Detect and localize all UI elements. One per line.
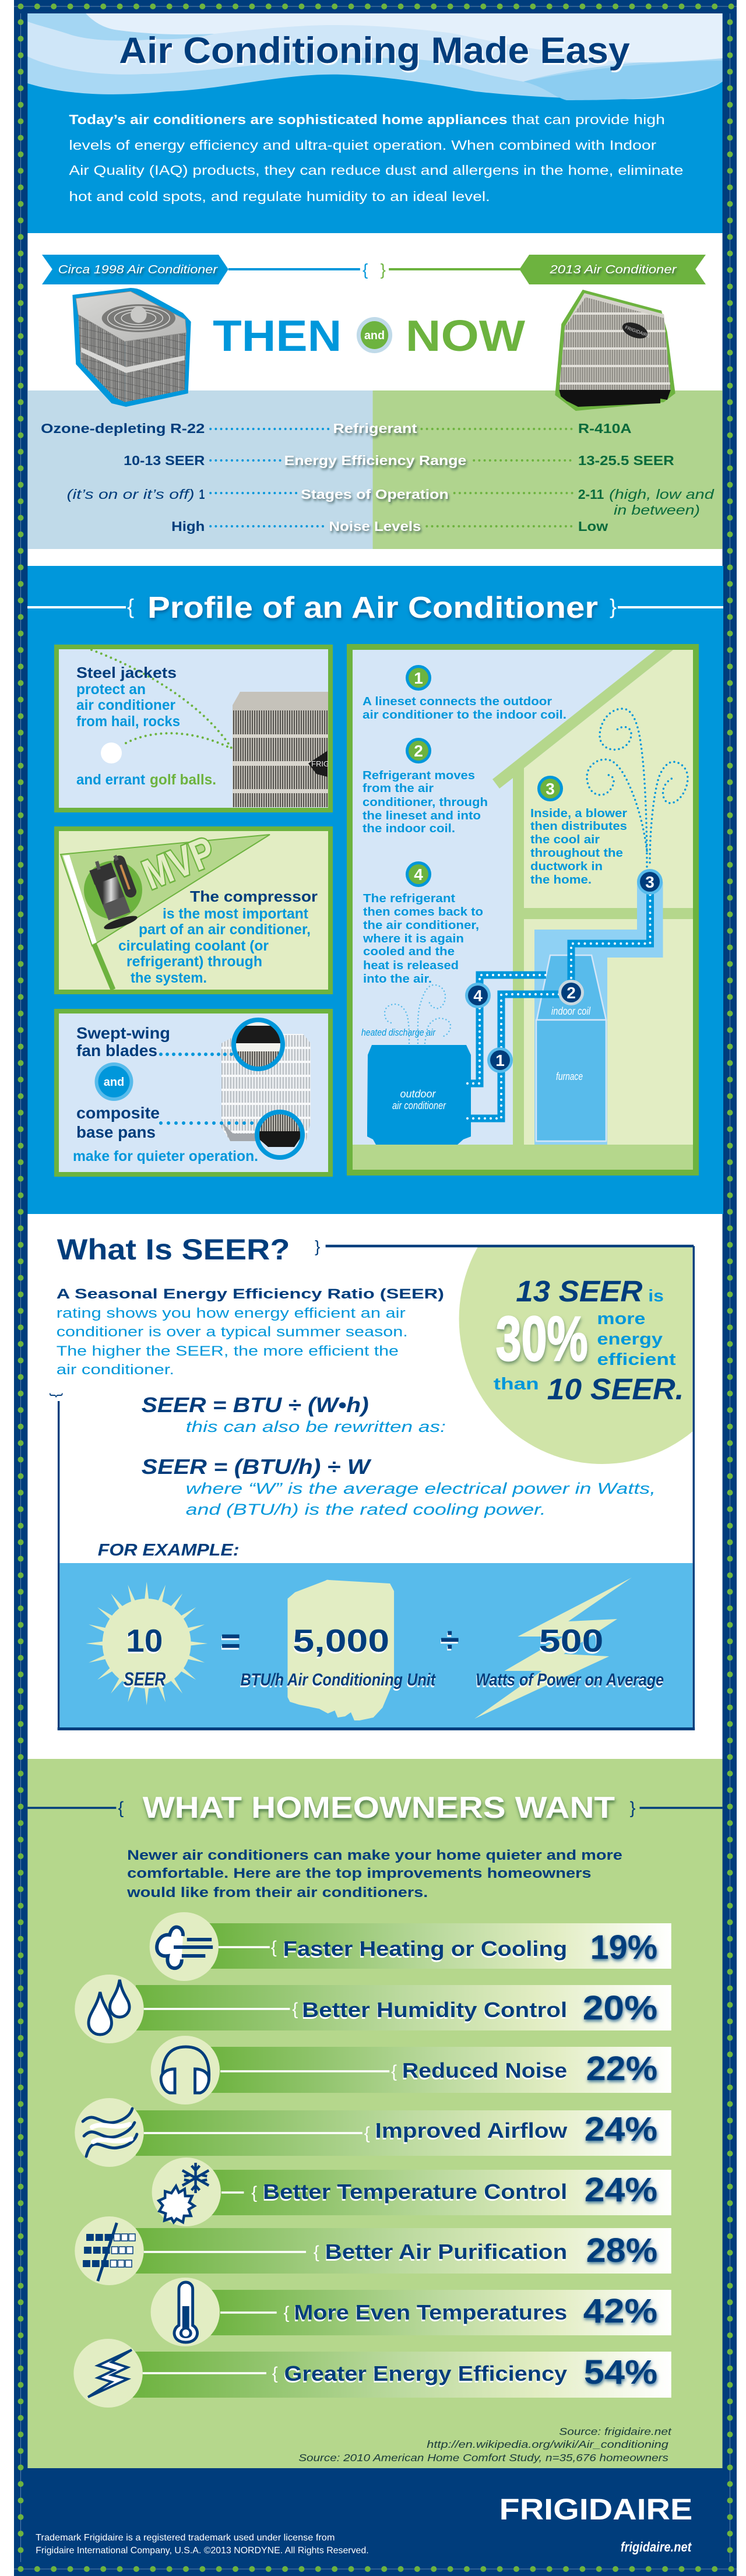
heading: profile: } bbox=[610, 594, 617, 618]
step 3: 3 bbox=[546, 780, 555, 798]
heading: then and now: and bbox=[364, 329, 385, 342]
text: quieter operation bbox=[73, 1024, 258, 1164]
row: better temperature control bbox=[152, 2158, 671, 2226]
card: compressor bbox=[57, 828, 330, 992]
callout: 30 percent: is bbox=[648, 1287, 664, 1305]
card: quieter operation bbox=[57, 1011, 330, 1174]
equation: 5000: BTU/h Air Conditioning Unit bbox=[241, 1670, 436, 1690]
step 4: into the air. bbox=[363, 973, 432, 986]
intro text: would like from their air conditioners. bbox=[126, 1885, 428, 1901]
step 2: conditioner, through bbox=[363, 796, 488, 809]
step 3: then distributes bbox=[530, 820, 627, 833]
text: compressor: is the most important bbox=[163, 906, 309, 922]
card: how the system works bbox=[350, 647, 696, 1173]
card: how the system works: heated discharge air bbox=[361, 1027, 436, 1038]
banner: 2013: 2013 Air Conditioner bbox=[549, 263, 677, 276]
sources: http://en.wikipedia.org/wiki/Air_conditioning bbox=[427, 2438, 668, 2450]
row: refrigerant: Ozone-depleting R-22 bbox=[41, 421, 205, 436]
step badges on diagram: 3 bbox=[645, 873, 654, 891]
heading: then and now bbox=[213, 312, 526, 360]
equation: 500: Watts of Power on Average bbox=[476, 1670, 664, 1690]
intro text: comfortable. Here are the top improvements homeowners bbox=[127, 1866, 592, 1881]
definition text: The higher the SEER, the more efficient the bbox=[57, 1343, 399, 1359]
row: more even temperatures: More Even Temperatures bbox=[294, 2301, 567, 2324]
panel: what homeowners want bbox=[27, 1759, 723, 2468]
row: energy efficiency range: 10-13 SEER bbox=[124, 453, 205, 468]
banner: circa 1998: { bbox=[363, 261, 368, 279]
formulas: where “W” is the average electrical power in Watts, bbox=[186, 1480, 656, 1497]
callout: 30 percent: energy bbox=[597, 1330, 663, 1349]
formulas: this can also be rewritten as: bbox=[186, 1418, 446, 1435]
step badges on diagram: 4 bbox=[473, 987, 483, 1005]
icon: air filter bbox=[83, 2223, 135, 2281]
intro text: that can provide high bbox=[512, 112, 665, 127]
furnace and indoor coil bbox=[536, 955, 606, 1141]
icon: energy bolt bbox=[88, 2350, 132, 2397]
text: quieter operation: fan blades bbox=[76, 1041, 157, 1060]
text: steel jackets: Steel jackets bbox=[76, 664, 177, 681]
row: stages of operation bbox=[66, 487, 715, 518]
icon: old air conditioner bbox=[72, 288, 191, 407]
air swirls: outdoor bbox=[385, 985, 451, 1043]
card: steel jackets bbox=[57, 647, 332, 810]
equation: 10 seer bbox=[124, 1623, 166, 1690]
text: quieter operation: composite bbox=[76, 1104, 160, 1122]
equation: 500: 500 bbox=[539, 1623, 603, 1659]
definition text: A Seasonal Energy Efficiency Ratio (SEER) bbox=[57, 1286, 444, 1302]
step 4: cooled and the bbox=[363, 945, 455, 958]
intro text: Newer air conditioners can make your home quieter and more bbox=[127, 1847, 622, 1863]
step 2 bbox=[363, 738, 488, 835]
icon: lightning bolt bbox=[474, 1578, 632, 1719]
step badges on diagram bbox=[465, 869, 663, 1073]
row: better temperature control: Better Temperature Control bbox=[263, 2180, 567, 2204]
row: improved airflow: Improved Airflow bbox=[375, 2119, 567, 2142]
row: faster heating or cooling bbox=[150, 1912, 671, 1981]
intro text: Today’s air conditioners are sophisticated home appliances bbox=[69, 112, 507, 127]
banner: circa 1998: Circa 1998 Air Conditioner bbox=[58, 263, 219, 276]
step 2: 2 bbox=[414, 742, 423, 760]
step 1: A lineset connects the outdoor bbox=[363, 695, 552, 708]
row: reduced noise: 22% bbox=[586, 2050, 657, 2088]
furnace and indoor coil: indoor coil bbox=[551, 1005, 591, 1017]
row: better humidity control bbox=[75, 1975, 671, 2043]
text: compressor: the system. bbox=[131, 970, 207, 986]
panel: what is seer bbox=[27, 1174, 745, 1759]
row: faster heating or cooling: { bbox=[271, 1938, 277, 1957]
text: compressor bbox=[118, 888, 318, 986]
step badges on diagram: 2 bbox=[566, 984, 576, 1002]
row: better air purification bbox=[75, 2216, 671, 2285]
heading: profile: Profile of an Air Conditioner bbox=[147, 591, 598, 625]
frame lines: } bbox=[315, 1237, 320, 1255]
step 2: the indoor coil. bbox=[363, 822, 455, 835]
sources bbox=[298, 2426, 672, 2464]
equation: 5000: 5,000 bbox=[293, 1623, 389, 1659]
row: stages of operation: 2-11 bbox=[578, 487, 604, 502]
callout circle bbox=[459, 1247, 692, 1464]
icon: compressor bbox=[97, 856, 139, 932]
refrigerant lines bbox=[467, 882, 650, 1118]
row: better humidity control: Better Humidity Control bbox=[302, 1998, 567, 2022]
row: noise levels bbox=[171, 519, 608, 534]
outdoor air conditioner: air conditioner bbox=[392, 1100, 446, 1111]
definition text: conditioner is over a typical summer season. bbox=[57, 1324, 408, 1340]
callout: 30 percent: more bbox=[597, 1310, 645, 1328]
step 4: where it is again bbox=[363, 932, 464, 945]
row: greater energy efficiency bbox=[73, 2339, 671, 2408]
logo: frigidaire: FRIGIDAIRE bbox=[499, 2493, 692, 2526]
callout: 30 percent: 10 SEER. bbox=[547, 1373, 684, 1406]
equation: 5000 bbox=[241, 1623, 436, 1690]
step 4: heat is released bbox=[363, 959, 459, 972]
intro text: levels of energy efficiency and ultra-quiet operation. When combined with Indoor bbox=[69, 138, 657, 153]
heading: homeowners bbox=[27, 1790, 723, 1824]
legal text bbox=[36, 2533, 369, 2556]
row: refrigerant bbox=[41, 421, 632, 436]
row: improved airflow: 24% bbox=[585, 2111, 657, 2148]
row: energy efficiency range bbox=[124, 453, 674, 468]
row: better temperature control: { bbox=[251, 2183, 257, 2202]
row: faster heating or cooling: 19% bbox=[590, 1929, 657, 1966]
icon: unit with steel jacket bbox=[233, 692, 332, 807]
row: greater energy efficiency: 54% bbox=[584, 2354, 657, 2391]
equation: equals: = bbox=[220, 1621, 241, 1660]
heading: then and now: NOW bbox=[406, 312, 526, 360]
row: reduced noise: { bbox=[391, 2062, 397, 2081]
text: compressor: circulating coolant (or bbox=[118, 938, 269, 954]
row: noise levels: Noise Levels bbox=[329, 519, 421, 534]
badge: and bbox=[94, 1062, 133, 1101]
frame lines: { bbox=[48, 1393, 64, 1398]
furnace and indoor coil: furnace bbox=[556, 1071, 583, 1082]
outdoor air conditioner: outdoor bbox=[400, 1088, 437, 1100]
icon: unit with steel jacket: FRIG bbox=[311, 759, 329, 768]
row: refrigerant: R-410A bbox=[578, 421, 632, 436]
panel: example equation bbox=[58, 1563, 695, 1730]
heading: homeowners: { bbox=[118, 1799, 124, 1818]
heading: what is seer: What Is SEER? bbox=[57, 1233, 290, 1266]
heading: homeowners: WHAT HOMEOWNERS WANT bbox=[143, 1790, 615, 1824]
row: reduced noise bbox=[151, 2036, 671, 2105]
row: refrigerant: Refrigerant bbox=[333, 421, 417, 436]
step 1 bbox=[363, 665, 566, 722]
icon: air blowing cloud bbox=[157, 1927, 213, 1968]
icon: snowflake and sun bbox=[159, 2163, 209, 2222]
step 4: then comes back to bbox=[363, 906, 483, 919]
panel: profile of an air conditioner bbox=[27, 566, 723, 1214]
callout: 30 percent bbox=[494, 1275, 684, 1406]
formulas: and (BTU/h) is the rated cooling power. bbox=[186, 1501, 546, 1518]
definition text: air conditioner. bbox=[57, 1362, 174, 1378]
text: compressor: part of an air conditioner, bbox=[139, 921, 311, 938]
row: energy efficiency range: 13-25.5 SEER bbox=[578, 453, 674, 468]
legal text: Frigidaire International Company, U.S.A. ©2013 NORDYNE. All Rights Reserved. bbox=[36, 2546, 369, 2556]
equation: 10 seer: SEER bbox=[124, 1669, 166, 1690]
website: frigidaire.net bbox=[621, 2539, 692, 2554]
icon: mvp pennant: MVP bbox=[136, 828, 221, 899]
icon: new air conditioner bbox=[555, 290, 675, 411]
icon: water drops bbox=[89, 1980, 129, 2035]
sources: Source: frigidaire.net bbox=[559, 2426, 672, 2437]
row: better temperature control: 24% bbox=[585, 2172, 657, 2209]
text: steel jackets: from hail, rocks bbox=[76, 713, 180, 730]
house bbox=[353, 650, 693, 1170]
callout: 30 percent: 30% bbox=[496, 1303, 588, 1374]
formulas: SEER = (BTU/h) ÷ W bbox=[142, 1455, 372, 1479]
text: steel jackets: protect an bbox=[76, 681, 146, 698]
callout dots bbox=[161, 1054, 256, 1123]
equation: 500 bbox=[476, 1623, 664, 1690]
icon: headphones bbox=[161, 2047, 209, 2093]
row: better air purification: Better Air Purification bbox=[325, 2240, 567, 2264]
text: steel jackets: golf balls. bbox=[150, 772, 216, 788]
step 2: the lineset and into bbox=[363, 810, 481, 822]
row: noise levels: Low bbox=[578, 519, 608, 534]
step 1: air conditioner to the indoor coil. bbox=[363, 709, 566, 722]
definition text bbox=[57, 1286, 444, 1378]
heading: then and now: THEN bbox=[213, 312, 342, 360]
callout: 30 percent: 13 SEER bbox=[516, 1275, 643, 1308]
sky waves bbox=[27, 13, 723, 100]
legal text: Trademark Frigidaire is a registered trademark used under license from bbox=[36, 2533, 335, 2543]
row: better air purification: 28% bbox=[586, 2232, 657, 2269]
row: energy efficiency range: Energy Efficiency Range bbox=[284, 453, 466, 468]
row: faster heating or cooling: Faster Heating or Cooling bbox=[283, 1937, 567, 1961]
heading: profile: { bbox=[127, 594, 134, 618]
row: greater energy efficiency: { bbox=[272, 2364, 278, 2383]
row: better humidity control: 20% bbox=[583, 1990, 657, 2027]
text: steel jackets: and errant bbox=[76, 772, 146, 788]
icon: new air conditioner: FRIGIDAIRE bbox=[624, 325, 651, 339]
step 2: Refrigerant moves bbox=[363, 769, 475, 782]
step 4: 4 bbox=[414, 865, 423, 884]
step 3: throughout the bbox=[530, 847, 623, 860]
intro text: Air Quality (IAQ) products, they can reduce dust and allergens in the home, eliminate bbox=[69, 163, 683, 178]
text: steel jackets bbox=[76, 664, 216, 788]
row: more even temperatures: 42% bbox=[583, 2293, 657, 2330]
text: quieter operation: make for quieter operation. bbox=[73, 1148, 258, 1164]
intro text bbox=[126, 1847, 622, 1901]
text: compressor: refrigerant) through bbox=[126, 953, 262, 970]
row: improved airflow: { bbox=[364, 2124, 370, 2143]
text: quieter operation: base pans bbox=[76, 1123, 156, 1141]
row: stages of operation: in between) bbox=[614, 502, 700, 518]
definition text: rating shows you how energy efficient an air bbox=[57, 1305, 406, 1321]
row: more even temperatures bbox=[151, 2278, 671, 2346]
icon: sun bbox=[86, 1582, 207, 1705]
row: better air purification: { bbox=[314, 2243, 319, 2262]
sources: Source: 2010 American Home Comfort Study, n=35,676 homeowners bbox=[298, 2452, 668, 2464]
frame lines bbox=[48, 1237, 694, 1730]
icon: golf ball bbox=[101, 742, 122, 763]
step 1: 1 bbox=[414, 669, 423, 687]
label: for example: FOR EXAMPLE: bbox=[98, 1541, 240, 1560]
text: quieter operation: Swept-wing bbox=[76, 1024, 170, 1042]
text: steel jackets: air conditioner bbox=[76, 697, 175, 713]
step 3: the cool air bbox=[530, 833, 600, 846]
panel: header bbox=[27, 13, 723, 233]
icon: air waves bbox=[83, 2109, 137, 2156]
heading: homeowners: } bbox=[630, 1799, 636, 1818]
duct bbox=[534, 882, 663, 1145]
badge: and: and bbox=[104, 1076, 124, 1089]
title: Air Conditioning Made Easy bbox=[119, 30, 630, 71]
heading: profile bbox=[27, 591, 723, 625]
banner: 2013: } bbox=[381, 261, 386, 279]
formulas bbox=[142, 1393, 656, 1518]
air swirls: indoor bbox=[587, 709, 688, 867]
row: more even temperatures: { bbox=[284, 2303, 289, 2322]
equation: divide: ÷ bbox=[441, 1620, 459, 1659]
outdoor air conditioner bbox=[367, 1045, 471, 1145]
step badges on diagram: 1 bbox=[495, 1051, 505, 1069]
step 4: The refrigerant bbox=[363, 892, 455, 905]
step 4 bbox=[363, 861, 483, 986]
golf ball trajectories bbox=[92, 650, 232, 749]
icon: thermometer bbox=[174, 2282, 198, 2342]
row: greater energy efficiency: Greater Energy Efficiency bbox=[284, 2362, 567, 2385]
intro text bbox=[69, 112, 683, 204]
row: stages of operation: (it’s on or it’s off) bbox=[66, 487, 195, 502]
text: compressor: The compressor bbox=[190, 888, 318, 905]
intro text: hot and cold spots, and regulate humidity to an ideal level. bbox=[69, 189, 490, 204]
row: stages of operation: (high, low and bbox=[609, 487, 715, 502]
step 3: Inside, a blower bbox=[530, 807, 627, 820]
step 2: from the air bbox=[363, 782, 434, 795]
comparison background bbox=[27, 390, 723, 549]
icon: white air conditioner bbox=[221, 1020, 311, 1157]
row: stages of operation: 1 bbox=[199, 487, 205, 502]
icon: unit silhouette bbox=[287, 1580, 394, 1720]
footer bbox=[36, 2493, 692, 2556]
callout: 30 percent: than bbox=[494, 1375, 539, 1393]
icon: mvp pennant bbox=[61, 828, 270, 990]
step 3: ductwork in bbox=[530, 860, 603, 873]
row: stages of operation: Stages of Operation bbox=[301, 487, 449, 502]
row: reduced noise: Reduced Noise bbox=[402, 2059, 567, 2082]
step 4: the air conditioner, bbox=[363, 919, 479, 932]
row: improved airflow bbox=[75, 2098, 671, 2167]
banner: circa 1998 bbox=[42, 255, 368, 284]
panel: then and now bbox=[27, 233, 723, 566]
formulas: SEER = BTU ÷ (W•h) bbox=[142, 1393, 369, 1417]
row: noise levels: High bbox=[171, 519, 205, 534]
callout: 30 percent: efficient bbox=[597, 1350, 676, 1369]
equation: 10 seer: 10 bbox=[126, 1623, 163, 1659]
banner: 2013 bbox=[381, 255, 706, 284]
step 3: the home. bbox=[530, 874, 592, 886]
row: better humidity control: { bbox=[292, 2000, 298, 2019]
step 3 bbox=[530, 776, 627, 886]
